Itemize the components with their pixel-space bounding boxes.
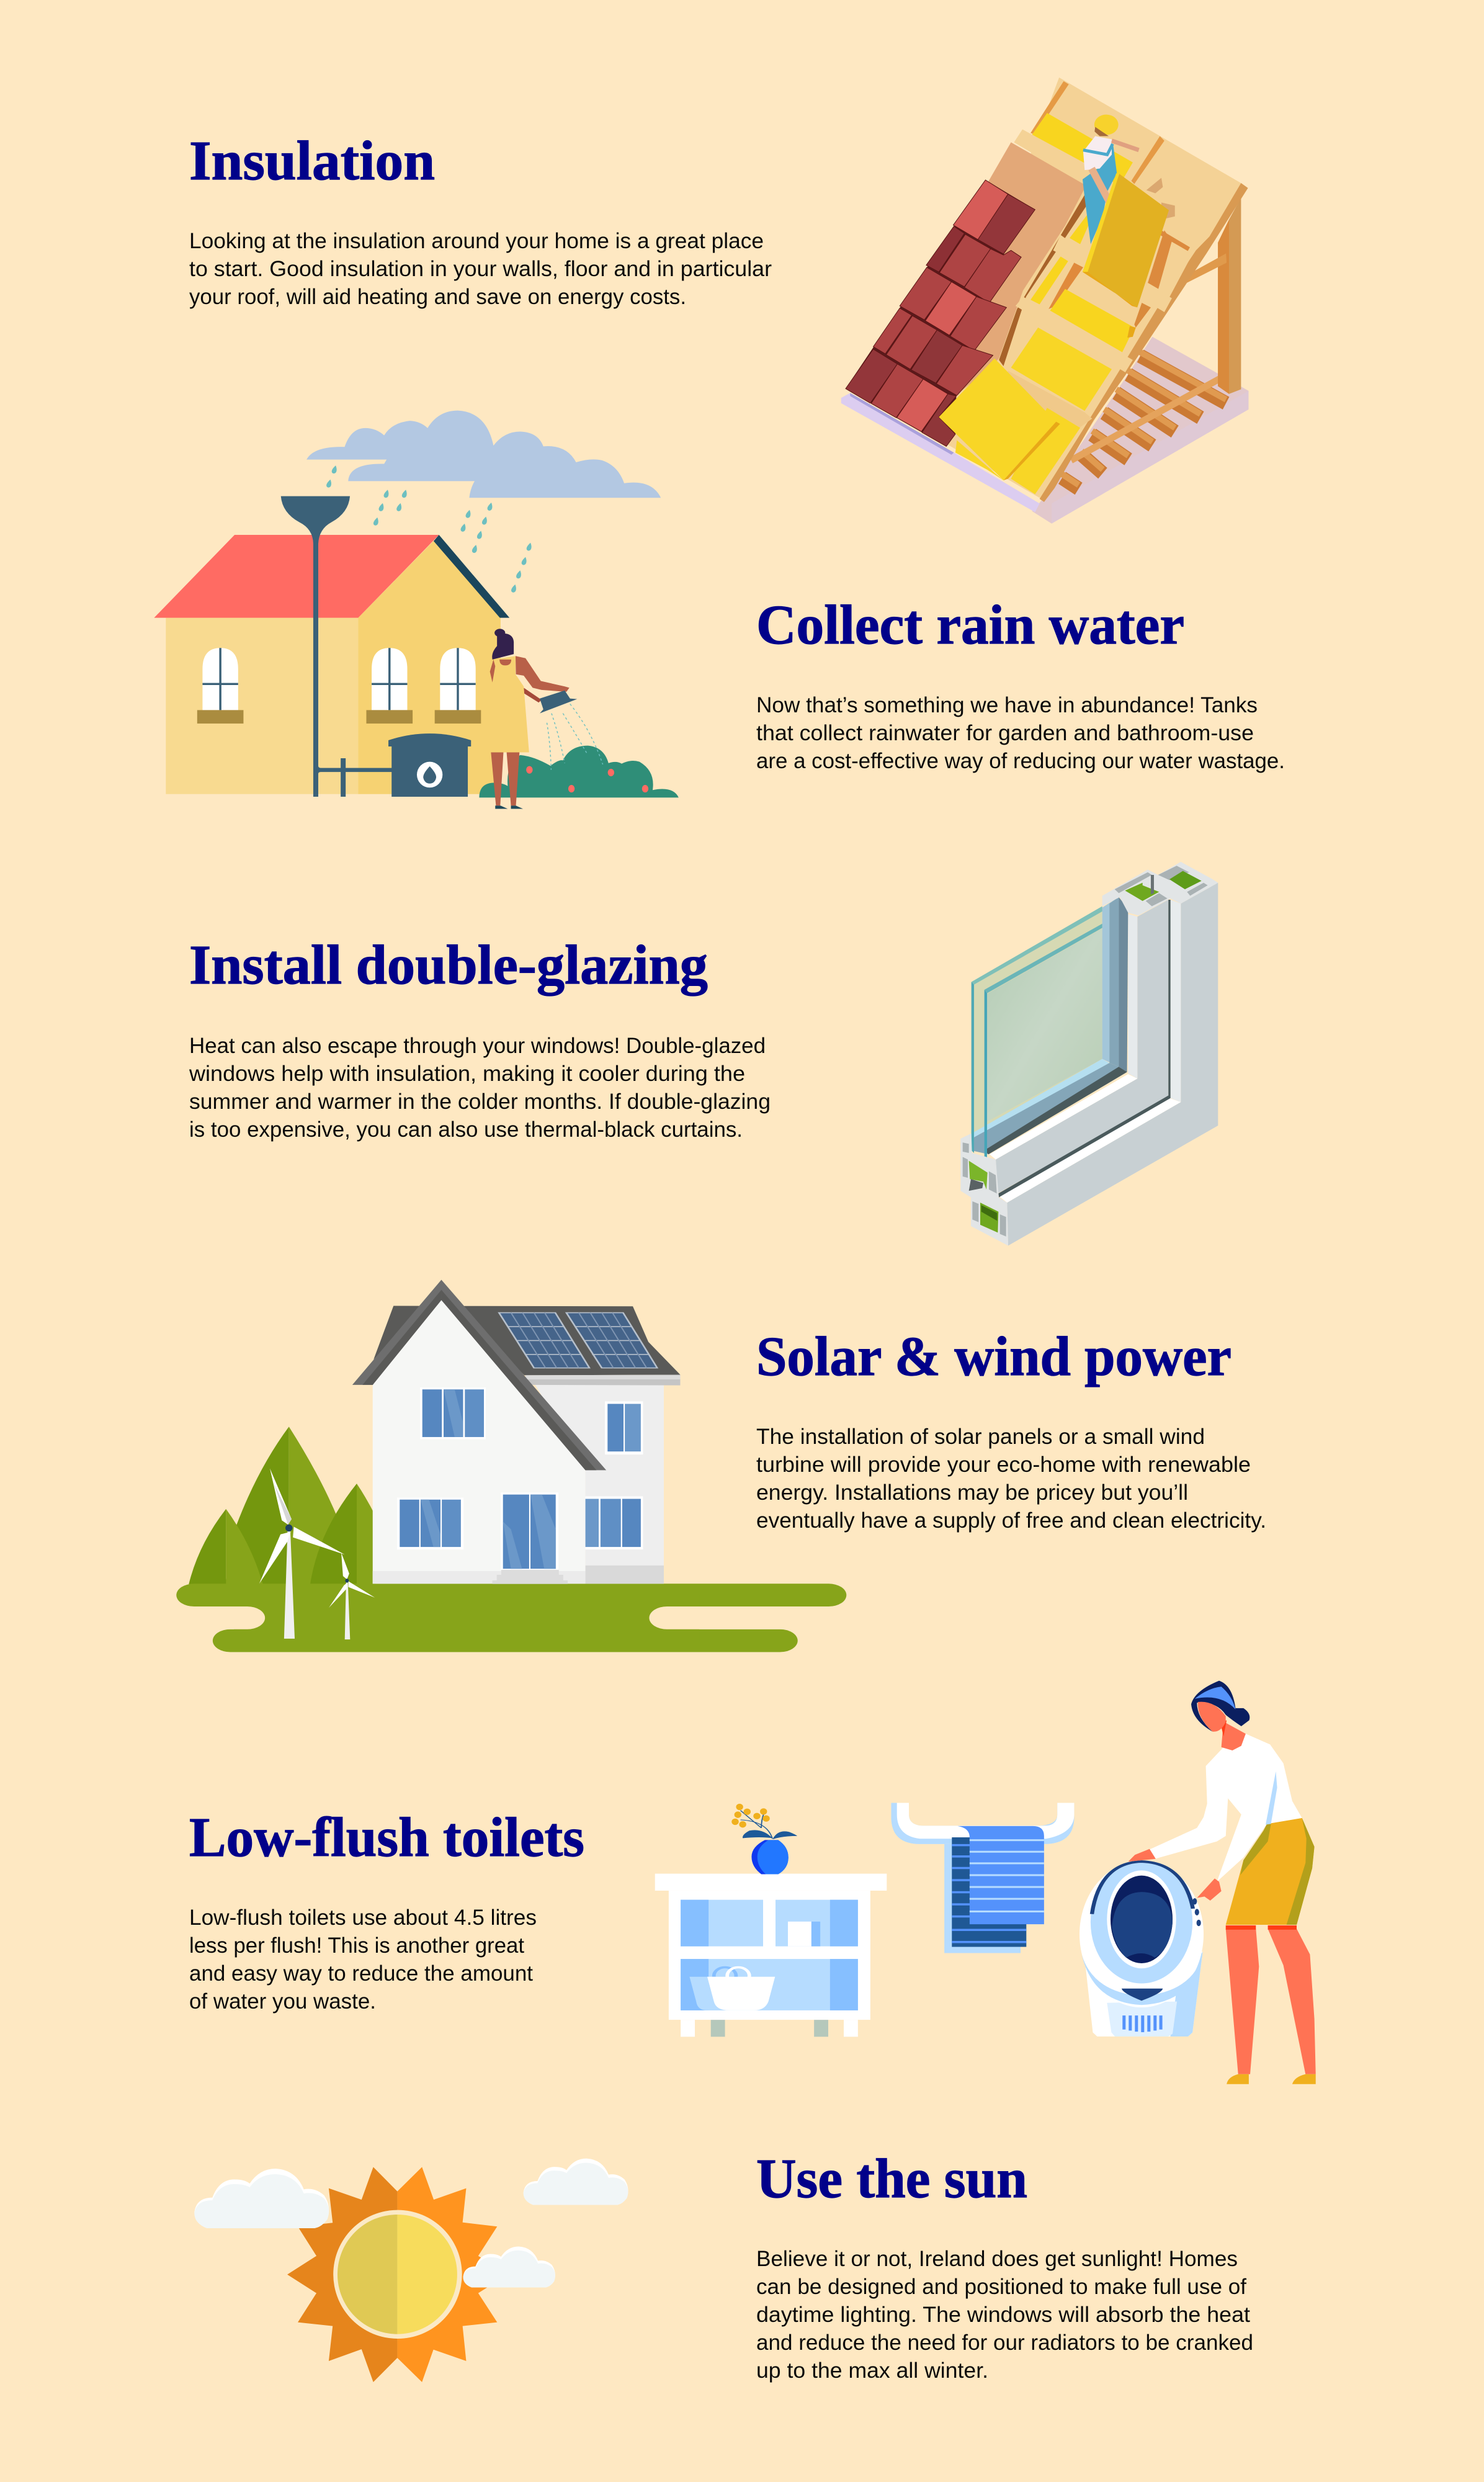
- text block: use the sun description: and reduce the need for our radiators to be cranked: [756, 2331, 1253, 2355]
- text block: use the sun description: can be designed and positioned to make full use of: [756, 2275, 1246, 2299]
- woman watering plants: [490, 629, 603, 809]
- windows and door: [397, 1387, 643, 1570]
- text block: solar and wind description: turbine will provide your eco-home with renewable: [756, 1453, 1251, 1477]
- house: [352, 1279, 680, 1584]
- text block: low-flush description: and easy way to reduce the amount: [189, 1961, 533, 1986]
- water tank: [388, 733, 471, 797]
- frame profile: bottom: [960, 1134, 1008, 1246]
- windows: [197, 648, 481, 724]
- trees: [189, 1427, 376, 1584]
- panel: insulation: [189, 78, 1249, 524]
- text block: solar and wind description: The installation of solar panels or a small wind: [756, 1425, 1205, 1449]
- solar panels: [499, 1313, 657, 1368]
- panel: low-flush toilets: [189, 1681, 1316, 2084]
- text block: low-flush description: Low-flush toilets use about 4.5 litres: [189, 1906, 537, 1930]
- heading: Low-flush toilets: Low-flush toilets: [189, 1807, 584, 1868]
- text block: solar and wind description: energy. Installations may be pricey but you’ll: [756, 1481, 1188, 1505]
- panel: use the sun: [194, 2148, 1253, 2383]
- heading: Use the sun: Use the sun: [756, 2148, 1027, 2210]
- towel rack and towels: [891, 1803, 1074, 1953]
- text block: use the sun description: up to the max all winter.: [756, 2359, 988, 2383]
- text block: use the sun description: [756, 2247, 1253, 2383]
- text block: low-flush description: less per flush! This is another great: [189, 1933, 524, 1958]
- text block: rain water description: that collect rainwater for garden and bathroom-use: [756, 721, 1254, 745]
- heading: Solar & wind power: Solar & wind power: [756, 1326, 1231, 1387]
- icon: sun: [287, 2167, 507, 2382]
- panel: install double-glazing: [189, 862, 1218, 1246]
- cabinet: [655, 1874, 887, 2036]
- text block: solar and wind description: eventually have a supply of free and clean electricity.: [756, 1508, 1266, 1533]
- text block: insulation description: your roof, will aid heating and save on energy costs.: [189, 285, 686, 309]
- illustration: solar house and wind turbines: [150, 1279, 915, 1652]
- heading: Collect rain water: Collect rain water: [756, 594, 1184, 656]
- illustration: house with rain collection: [154, 411, 679, 809]
- woman: [1129, 1681, 1316, 2084]
- icon: cloud over sun: [463, 2247, 555, 2288]
- icon: cloud left: [194, 2169, 329, 2228]
- icon: cloud top right: [524, 2159, 628, 2205]
- heading: Install double-glazing: Install double-glazing: [189, 934, 708, 996]
- panel: solar and wind power: [150, 1279, 1266, 1652]
- text block: double-glazing description: Heat can also escape through your windows! Double-glazed: [189, 1034, 766, 1058]
- illustration: sun and clouds: [194, 2159, 628, 2382]
- text block: double-glazing description: [189, 1034, 771, 1142]
- text block: double-glazing description: summer and warmer in the colder months. If double-glazing: [189, 1090, 771, 1114]
- text block: double-glazing description: is too expensive, you can also use thermal-black curtains.: [189, 1118, 743, 1142]
- text block: low-flush description: of water you waste.: [189, 1989, 376, 2014]
- text block: use the sun description: daytime lighting. The windows will absorb the heat: [756, 2303, 1250, 2327]
- illustration: double-glazed window cross-section: [960, 862, 1218, 1246]
- low-flush toilet: [1079, 1861, 1204, 2036]
- vase with flowers: [731, 1804, 797, 1874]
- text block: insulation description: Looking at the insulation around your home is a great place: [189, 229, 764, 253]
- text block: rain water description: are a cost-effective way of reducing our water wastage.: [756, 749, 1285, 773]
- text block: rain water description: Now that’s something we have in abundance! Tanks: [756, 693, 1258, 717]
- illustration: roof insulation with worker: [841, 78, 1249, 524]
- text block: rain water description: [756, 693, 1285, 773]
- text block: solar and wind description: [756, 1425, 1266, 1533]
- text block: low-flush description: [189, 1906, 537, 2014]
- text block: insulation description: to start. Good insulation in your walls, floor and in particular: [189, 257, 772, 281]
- house walls and roof: [154, 535, 509, 794]
- frame profile: top: [1102, 862, 1218, 915]
- icon: wind turbines: [259, 1469, 375, 1639]
- grass: [150, 1584, 915, 1652]
- illustration: bathroom with woman and toilet: [655, 1681, 1316, 2084]
- rain pipe and funnel: [281, 496, 392, 797]
- text block: double-glazing description: windows help with insulation, making it cooler during the: [189, 1062, 745, 1086]
- text block: use the sun description: Believe it or not, Ireland does get sunlight! Homes: [756, 2247, 1238, 2271]
- icon: rain drops: [326, 465, 532, 593]
- bush: [479, 746, 679, 797]
- panel: collect rain water: [154, 411, 1285, 809]
- icon: rain clouds: [306, 411, 661, 498]
- glass panes: [971, 897, 1128, 1162]
- heading: Insulation: Insulation: [189, 130, 435, 192]
- text block: insulation description: [189, 229, 772, 309]
- worker figure: [1083, 115, 1139, 244]
